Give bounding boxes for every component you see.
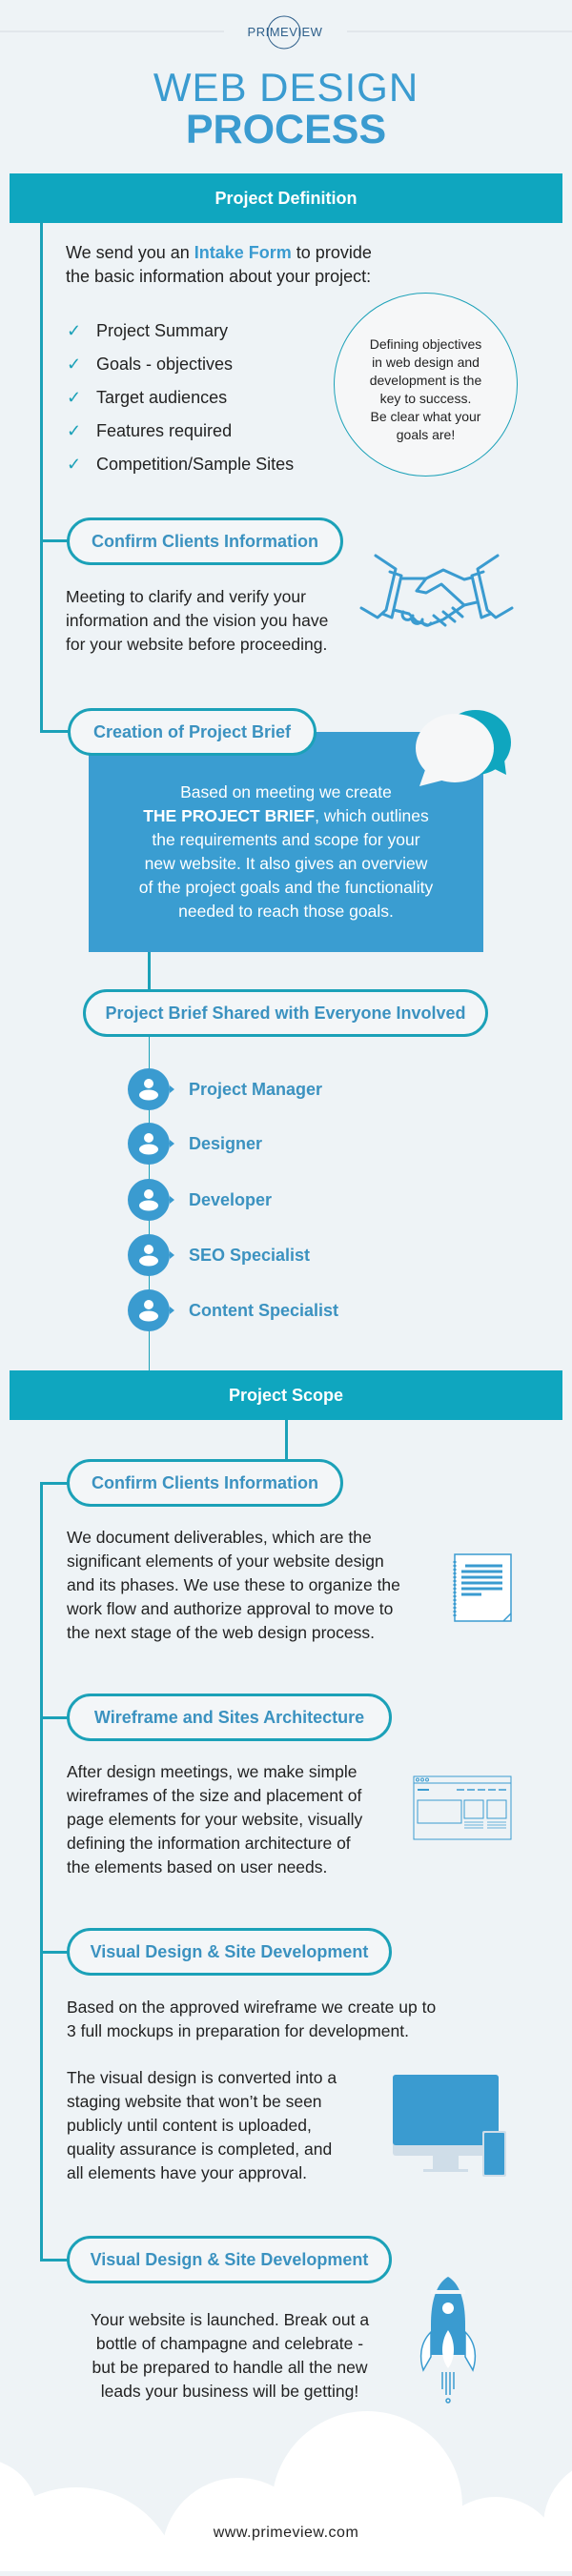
callout circle: development is the <box>370 373 481 388</box>
person: SEO Specialist: SEO Specialist <box>189 1246 310 1265</box>
text: staging <box>67 2068 337 2182</box>
connector <box>40 730 69 733</box>
text: deliverables: and its phases. We use these to organize the <box>67 1575 400 1594</box>
pill: Visual Design: Visual Design & Site Development <box>91 1942 368 1961</box>
person: Project Manager <box>128 1068 322 1110</box>
person: Developer: Developer <box>189 1190 272 1209</box>
text: deliverables: significant elements of your website design <box>67 1552 384 1571</box>
text: deliverables: the next stage of the web design process. <box>67 1623 375 1642</box>
text: meeting: for your website before proceeding. <box>66 635 327 654</box>
text: meeting: information and the vision you have <box>66 611 328 630</box>
icon: rocket <box>419 2277 477 2404</box>
text: mockups: Based on the approved wireframe we create up to <box>67 1998 436 2017</box>
blue box: project brief: THE PROJECT BRIEF, which outlines <box>143 806 429 825</box>
pill: Wireframe: Wireframe and Sites Architecture <box>94 1708 364 1727</box>
text: launch: bottle of champagne and celebrate - <box>96 2334 363 2353</box>
checklist: ✓ <box>67 388 81 407</box>
text: mockups <box>67 1998 436 2040</box>
text: launch: Your website is launched. Break out a <box>91 2310 369 2329</box>
pill: Creation of Project Brief: Creation of Project Brief <box>93 722 291 741</box>
pill: Confirm Clients Information (scope): Confirm Clients Information <box>92 1473 318 1492</box>
checklist: Target audiences <box>96 388 227 407</box>
text: staging: publicly until content is uploaded, <box>67 2116 312 2135</box>
person: Content Specialist: Content Specialist <box>189 1301 338 1320</box>
blue box: project brief <box>89 732 483 952</box>
text: deliverables: We document deliverables, which are the <box>67 1528 372 1547</box>
checklist: Competition/Sample Sites <box>96 455 294 474</box>
icon: document <box>454 1553 512 1622</box>
person: Developer <box>128 1179 272 1221</box>
callout circle: in web design and <box>372 355 480 370</box>
intake text <box>66 243 372 286</box>
icon: wireframe <box>414 1776 511 1839</box>
text: launch <box>91 2310 370 2401</box>
text: deliverables <box>67 1528 400 1642</box>
person: Content Specialist <box>128 1289 338 1331</box>
connector <box>40 539 69 542</box>
callout circle: goals are! <box>397 427 455 442</box>
callout circle: Defining objectives <box>370 336 481 352</box>
checklist: ✓ <box>67 321 81 340</box>
text: meeting <box>66 587 328 654</box>
section bar: Project Scope <box>10 1370 562 1420</box>
text: deliverables: work flow and authorize approval to move to <box>67 1599 393 1618</box>
checklist: Features required <box>96 421 232 440</box>
person: Designer: Designer <box>189 1134 262 1153</box>
checklist: Goals - objectives <box>96 355 233 374</box>
text: wireframes: page elements for your website, visually <box>67 1810 362 1829</box>
checklist: ✓ <box>67 455 81 474</box>
text: staging: quality assurance is completed, and <box>67 2140 332 2159</box>
pill: Confirm Clients Information <box>67 517 343 565</box>
person: Project Manager: Project Manager <box>189 1080 322 1099</box>
text: wireframes <box>67 1762 362 1876</box>
section bar: Project Scope: Project Scope <box>229 1386 343 1405</box>
text: launch: but be prepared to handle all the new <box>92 2358 367 2377</box>
person: SEO Specialist <box>128 1234 310 1276</box>
icon: handshake <box>359 554 514 627</box>
callout circle: key to success. <box>380 391 471 406</box>
clouds <box>0 2411 572 2571</box>
text: wireframes: defining the information architecture of <box>67 1834 351 1853</box>
pill: Creation of Project Brief <box>68 708 317 756</box>
text: staging: The visual design is converted into a <box>67 2068 337 2087</box>
pill: Visual Design <box>67 1928 392 1976</box>
callout circle <box>334 293 518 477</box>
intake text: We send you an Intake Form to provide <box>66 243 372 262</box>
intake text: the basic information about your project: <box>66 267 371 286</box>
pill: Confirm Clients Information (scope) <box>67 1459 343 1507</box>
title <box>153 65 419 152</box>
title: PROCESS <box>186 107 386 152</box>
logo header: PRIMEVIEW <box>248 25 323 39</box>
blue box: project brief: new website. It also gives an overview <box>145 854 427 873</box>
text: staging: all elements have your approval. <box>67 2163 307 2182</box>
blue box: project brief: of the project goals and the functionality <box>139 878 433 897</box>
person: Designer <box>128 1123 262 1165</box>
logo header <box>0 15 572 50</box>
section bar: Project Definition <box>10 173 562 223</box>
blue box: project brief: the requirements and scope for your <box>152 830 420 849</box>
icon: speech bubble <box>416 710 511 786</box>
callout circle: Be clear what your <box>371 409 480 424</box>
text: wireframes: the elements based on user needs. <box>67 1857 327 1876</box>
text: staging: staging website that won’t be seen <box>67 2092 322 2111</box>
text: launch: leads your business will be getting! <box>101 2382 358 2401</box>
text: mockups: 3 full mockups in preparation for development. <box>67 2021 409 2040</box>
text: wireframes: wireframes of the size and placement of <box>67 1786 361 1805</box>
section bar: Project Definition: Project Definition <box>214 189 357 208</box>
icon: monitor and phone <box>393 2075 506 2177</box>
pill: Visual Design 2 <box>67 2236 392 2283</box>
blue box: project brief: needed to reach those goals. <box>178 902 394 921</box>
blue box: project brief: Based on meeting we create <box>180 782 392 801</box>
pill: Confirm Clients Information: Confirm Clients Information <box>92 532 318 551</box>
text: meeting: Meeting to clarify and verify your <box>66 587 306 606</box>
pill: Project Brief Shared <box>83 989 488 1037</box>
checklist: ✓ <box>67 355 81 374</box>
text: wireframes: After design meetings, we make simple <box>67 1762 357 1781</box>
pill: Visual Design 2: Visual Design & Site Development <box>91 2250 368 2269</box>
pill: Project Brief Shared: Project Brief Shared with Everyone Involved <box>105 1004 466 1023</box>
checklist: Project Summary <box>96 321 228 340</box>
checklist: ✓ <box>67 421 81 440</box>
title: WEB DESIGN <box>153 65 419 110</box>
footer url: www.primeview.com <box>214 2525 358 2541</box>
checklist <box>67 321 294 474</box>
pill: Wireframe <box>67 1694 392 1741</box>
